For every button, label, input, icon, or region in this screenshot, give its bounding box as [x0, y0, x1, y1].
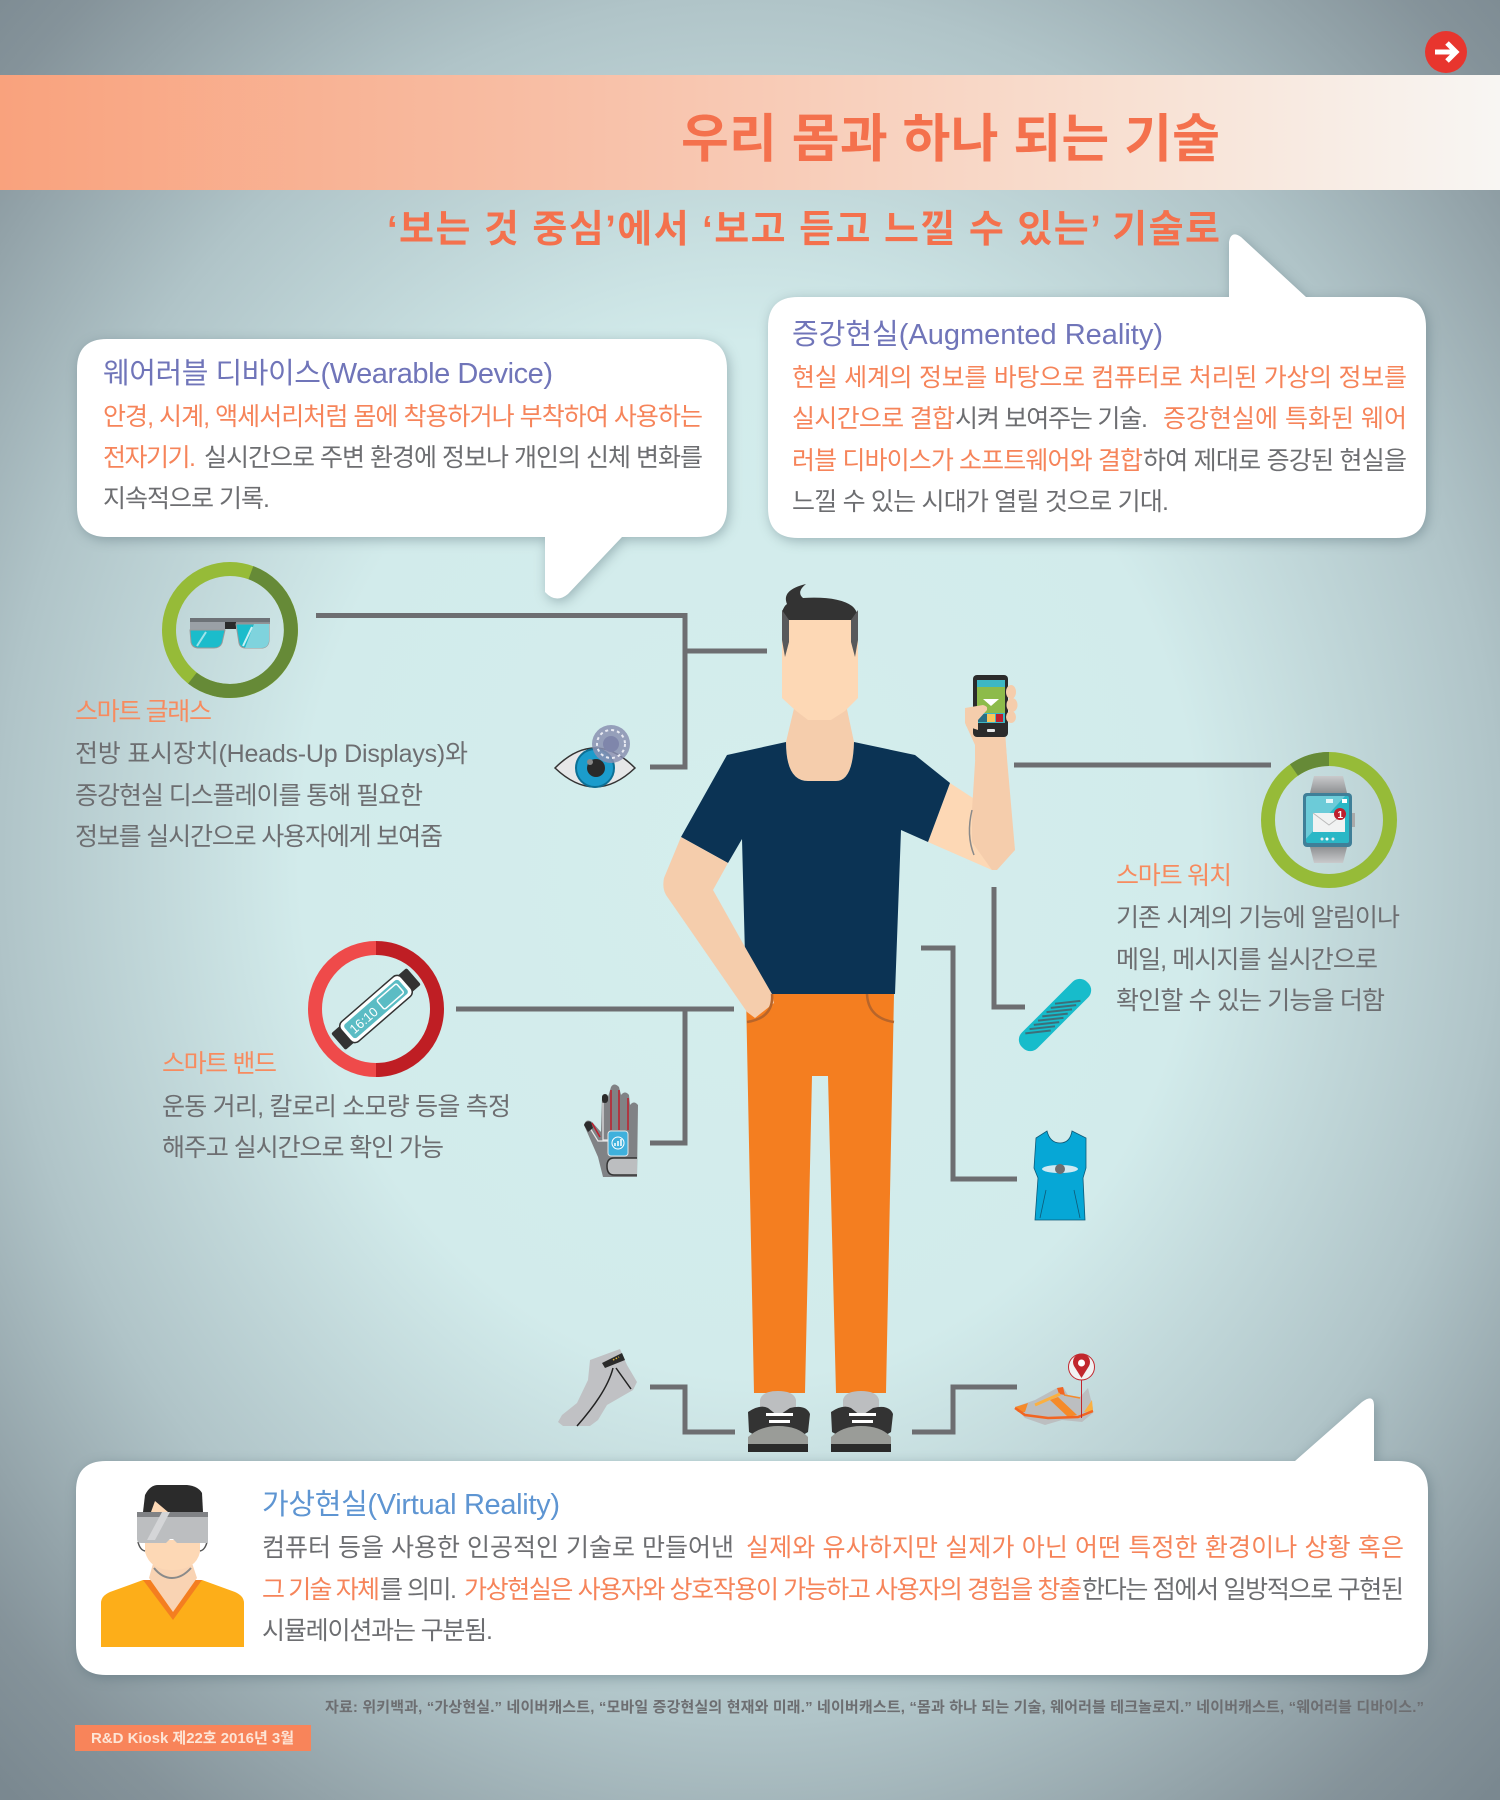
text block: smart glasses [75, 698, 468, 851]
panel: augmented reality speech bubble: 하여 제대로 증강된 현실을 [1143, 447, 1407, 475]
panel: wearable device speech bubble [77, 339, 727, 599]
text block: smart band: 스마트 밴드 [162, 1050, 277, 1078]
shoes [748, 1391, 810, 1452]
connector lines left middle [456, 1009, 734, 1143]
icon: next arrow button [1425, 31, 1467, 73]
panel: virtual reality speech bubble: 가상현실(Virtual Reality) [262, 1489, 560, 1521]
text block: smart band: 운동 거리, 칼로리 소모량 등을 측정 [162, 1093, 511, 1121]
panel: augmented reality speech bubble: 러블 디바이스가 소프트웨어와 결합 [792, 447, 1143, 475]
panel: virtual reality speech bubble: 한다는 점에서 일방적으로 구현된 [1082, 1576, 1404, 1604]
icon: smart watch ring [1268, 759, 1390, 881]
connector line sock [650, 1387, 735, 1432]
text block: smart watch: 기존 시계의 기능에 알림이나 [1116, 904, 1400, 932]
t-shirt [681, 742, 950, 994]
text block: smart glasses: 정보를 실시간으로 사용자에게 보여줌 [75, 823, 443, 851]
panel: virtual reality speech bubble: 시뮬레이션과는 구분됨. [262, 1617, 493, 1645]
text block: smart watch [1116, 862, 1400, 1015]
panel: wearable device speech bubble: 웨어러블 디바이스(Wearable Device) [103, 358, 553, 390]
icon: smart glove [584, 1084, 638, 1177]
title banner: 우리 몸과 하나 되는 기술 [681, 111, 1220, 169]
icon: smart vest [1034, 1131, 1086, 1220]
text block: smart watch: 메일, 메시지를 실시간으로 [1116, 946, 1378, 974]
panel: wearable device speech bubble: 지속적으로 기록. [103, 485, 270, 513]
icon: smart contact lens eye [555, 725, 635, 787]
panel: augmented reality speech bubble: 시켜 보여주는 기술. [955, 405, 1148, 433]
text block: smart glasses: 전방 표시장치(Heads-Up Displays)와 [75, 740, 468, 768]
connector line gps shoe [912, 1387, 1017, 1432]
panel: augmented reality speech bubble: 실시간으로 결합 [792, 405, 955, 433]
face [782, 620, 858, 720]
publication badge: R&D Kiosk 제22호 2016년 3월 [91, 1730, 294, 1747]
connector line vest [921, 948, 1017, 1179]
upper right arm [928, 783, 1015, 870]
thumb [965, 705, 987, 730]
icon: smart patch [1015, 975, 1095, 1055]
text block: smart glasses: 증강현실 디스플레이를 통해 필요한 [75, 782, 423, 810]
panel: wearable device speech bubble: 전자기기. [103, 444, 196, 472]
text block: smart band: 해주고 실시간으로 확인 가능 [162, 1134, 444, 1162]
neck [786, 700, 854, 781]
fingers [1006, 685, 1018, 723]
panel: virtual reality speech bubble: 실제와 유사하지만 실제가 아닌 어떤 특정한 환경이나 상황 혹은 [746, 1534, 1404, 1562]
icon: gps running shoe [1015, 1354, 1094, 1425]
icon: smart glasses ring [169, 569, 291, 691]
icon: smart band ring: 16:10 [347, 1004, 381, 1037]
subtitle: ‘보는 것 중심’에서 ‘보고 듣고 느낄 수 있는’ 기술로 [387, 209, 1220, 251]
icon: VR headset person [101, 1485, 244, 1647]
panel: augmented reality speech bubble: 증강현실(Augmented Reality) [792, 319, 1163, 351]
pants [746, 994, 894, 1393]
phone [973, 675, 1008, 737]
arm crease [969, 810, 974, 855]
panel: virtual reality speech bubble: 가상현실은 사용자와 상호작용이 가능하고 사용자의 경험을 창출 [464, 1576, 1082, 1604]
panel: augmented reality speech bubble: 현실 세계의 정보를 바탕으로 컴퓨터로 처리된 가상의 정보를 [792, 364, 1407, 392]
title banner [0, 75, 1500, 190]
publication badge [75, 1725, 311, 1751]
panel: virtual reality speech bubble: 를 의미. [380, 1576, 457, 1604]
panel: wearable device speech bubble: 실시간으로 주변 환경에 정보나 개인의 신체 변화를 [204, 444, 703, 472]
panel: virtual reality speech bubble: 컴퓨터 등을 사용한 인공적인 기술로 만들어낸 [262, 1534, 734, 1562]
hair [782, 584, 858, 620]
forearm [972, 747, 1015, 870]
pockets [747, 994, 894, 1022]
icon: smart band ring [315, 948, 437, 1070]
panel: augmented reality speech bubble: 증강현실에 특화된 웨어 [1163, 405, 1407, 433]
connector lines left top [316, 616, 767, 767]
connector line right band [994, 887, 1025, 1007]
panel: wearable device speech bubble: 안경, 시계, 액세서리처럼 몸에 착용하거나 부착하여 사용하는 [103, 403, 703, 431]
text block: smart glasses: 스마트 글래스 [75, 698, 212, 726]
panel: virtual reality speech bubble: 그 기술 자체 [262, 1576, 380, 1604]
text block: smart watch: 확인할 수 있는 기능을 더함 [1116, 987, 1385, 1015]
icon: smart sock [558, 1349, 637, 1426]
panel: augmented reality speech bubble: 느낄 수 있는 시대가 열릴 것으로 기대. [792, 488, 1169, 516]
figure: man [663, 584, 1018, 1452]
panel: augmented reality speech bubble [768, 234, 1426, 538]
connector line smart watch [1014, 762, 1271, 768]
panel: virtual reality speech bubble [76, 1398, 1428, 1675]
left arm [663, 837, 774, 1018]
icon: smart watch ring: 1 [1338, 810, 1344, 821]
text block: smart watch: 스마트 워치 [1116, 862, 1232, 890]
text block: smart band [162, 1050, 511, 1162]
source note: 자료: 위키백과, “가상현실.” 네이버캐스트, “모바일 증강현실의 현재와 미래.” 네이버캐스트, “몸과 하나 되는 기술, 웨어러블 테크놀로지.” 네이버캐스트, “웨어러블 디바이스.” [325, 1699, 1424, 1716]
hand palm [965, 700, 1008, 760]
